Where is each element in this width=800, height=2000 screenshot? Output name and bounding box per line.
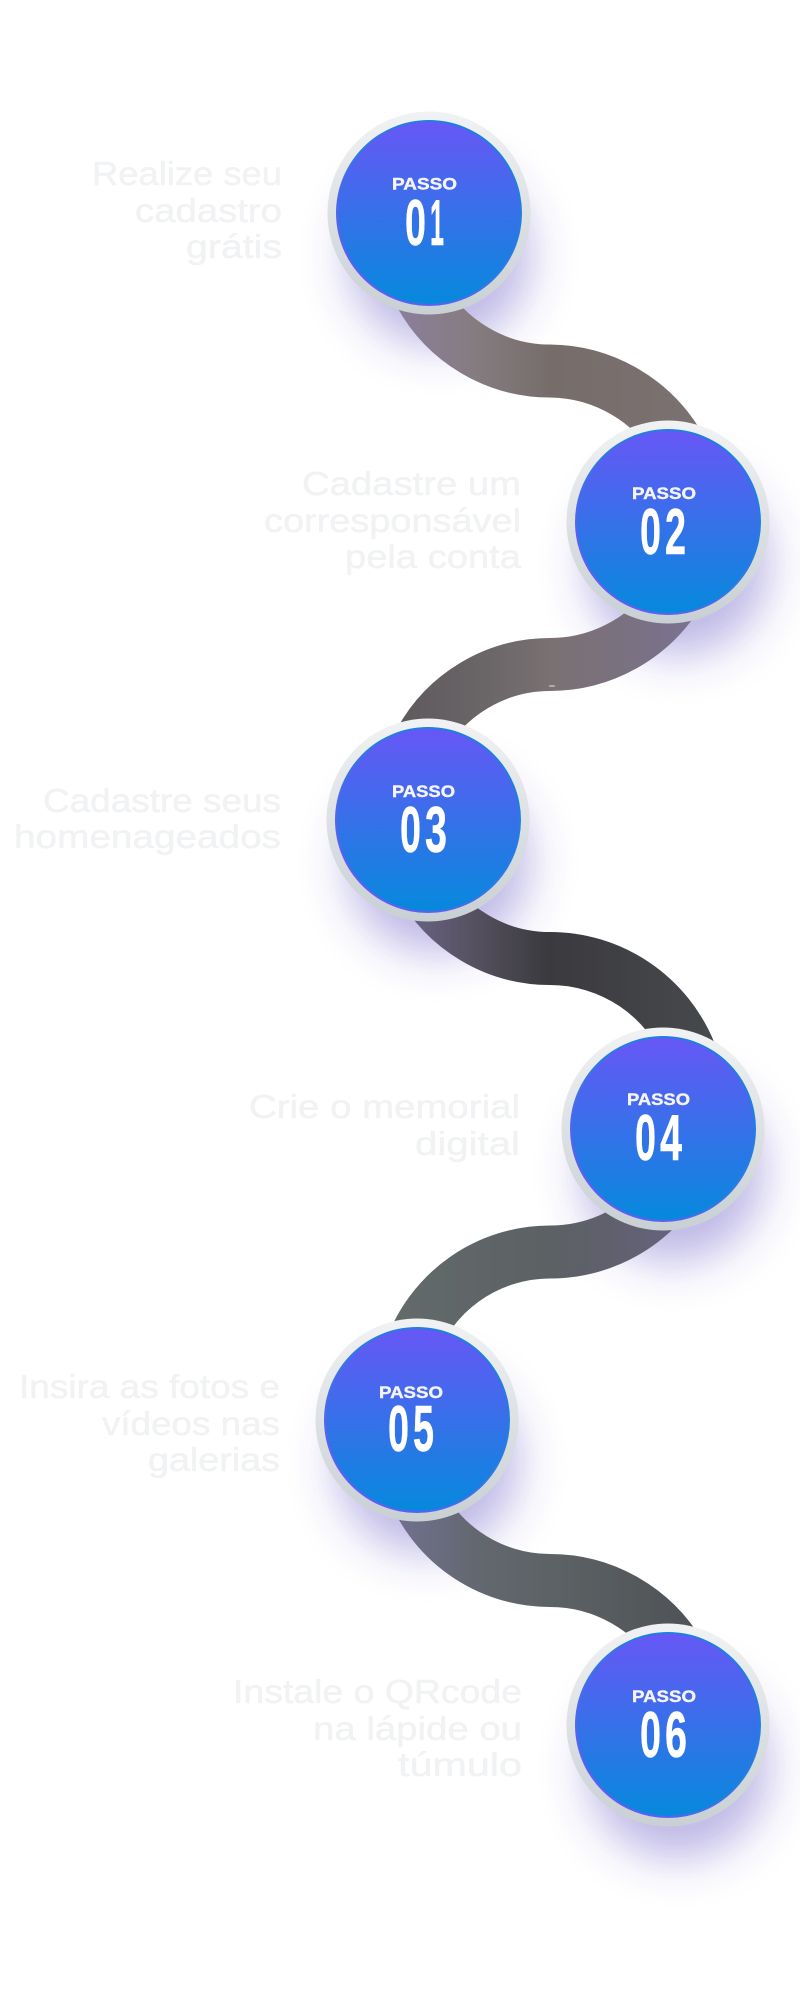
step 2 description: pela conta	[345, 538, 522, 575]
shadow: step 3	[346, 770, 530, 954]
connector ribbon: step 4 to 5	[410, 1205, 660, 1352]
step 4 description: digital	[415, 1125, 520, 1162]
step 2 badge: PASSO	[632, 484, 696, 503]
step 4 badge: 0	[635, 1101, 656, 1174]
shadow: step 1	[347, 163, 531, 347]
step 6	[233, 1624, 770, 1826]
connector ribbon: step 5 to 6	[410, 1480, 680, 1655]
step 5 description: vídeos nas	[102, 1405, 280, 1442]
connector ribbon: step 3 to 4	[420, 881, 690, 1053]
step 3	[14, 718, 530, 922]
step 1 badge	[328, 112, 530, 314]
step 3 badge: PASSO	[392, 782, 455, 801]
connector ribbon: step 1 to 2	[420, 294, 680, 448]
step 6 description: na lápide ou	[313, 1710, 522, 1747]
step 1 description: Realize seu	[92, 155, 282, 192]
step 4 badge: 4	[660, 1101, 682, 1174]
step 2	[264, 420, 770, 624]
step 6 badge: PASSO	[632, 1687, 696, 1706]
step 5 badge: 5	[413, 1392, 434, 1465]
step 1 description: grátis	[186, 228, 282, 265]
step 4 badge	[562, 1028, 764, 1230]
step 4 badge: PASSO	[627, 1090, 690, 1109]
step 2 badge	[566, 420, 770, 624]
step 5 description: Insira as fotos e	[19, 1368, 280, 1405]
step 1 description: cadastro	[135, 192, 282, 229]
shadow: step 6	[586, 1675, 770, 1859]
step 5 description: galerias	[148, 1441, 280, 1478]
step 1	[92, 112, 530, 314]
step 3 badge: 3	[425, 793, 447, 866]
shadow: step 4	[581, 1079, 765, 1263]
step 3 badge	[326, 718, 530, 922]
step 3 badge: 0	[400, 793, 421, 866]
step 1 badge: 0	[405, 186, 426, 259]
step 6 badge	[566, 1624, 770, 1826]
step 5 badge	[316, 1318, 518, 1522]
step 2 badge: 0	[640, 495, 661, 568]
step 2 description: Cadastre um	[302, 465, 521, 502]
step 3 description: homenageados	[14, 818, 281, 855]
connector ribbon: step 2 to 3	[420, 590, 680, 742]
step 5 badge: 0	[388, 1392, 409, 1465]
step 5	[19, 1318, 518, 1522]
step 4	[249, 1028, 764, 1230]
step 1 badge: 1	[430, 186, 444, 259]
step 5 badge: PASSO	[379, 1383, 443, 1402]
step 3 description: Cadastre seus	[43, 782, 281, 819]
step 4 description: Crie o memorial	[249, 1088, 520, 1125]
step 6 description: Instale o QRcode	[233, 1673, 522, 1710]
shadow: step 2	[586, 472, 770, 656]
shadow: step 5	[335, 1370, 519, 1554]
step 2 description: corresponsável	[264, 502, 521, 539]
step 6 badge: 0	[640, 1698, 661, 1771]
step 2 badge: 2	[665, 495, 686, 568]
step 6 description: túmulo	[398, 1746, 522, 1783]
step 1 badge: PASSO	[392, 174, 457, 194]
step 6 badge: 6	[665, 1698, 687, 1771]
